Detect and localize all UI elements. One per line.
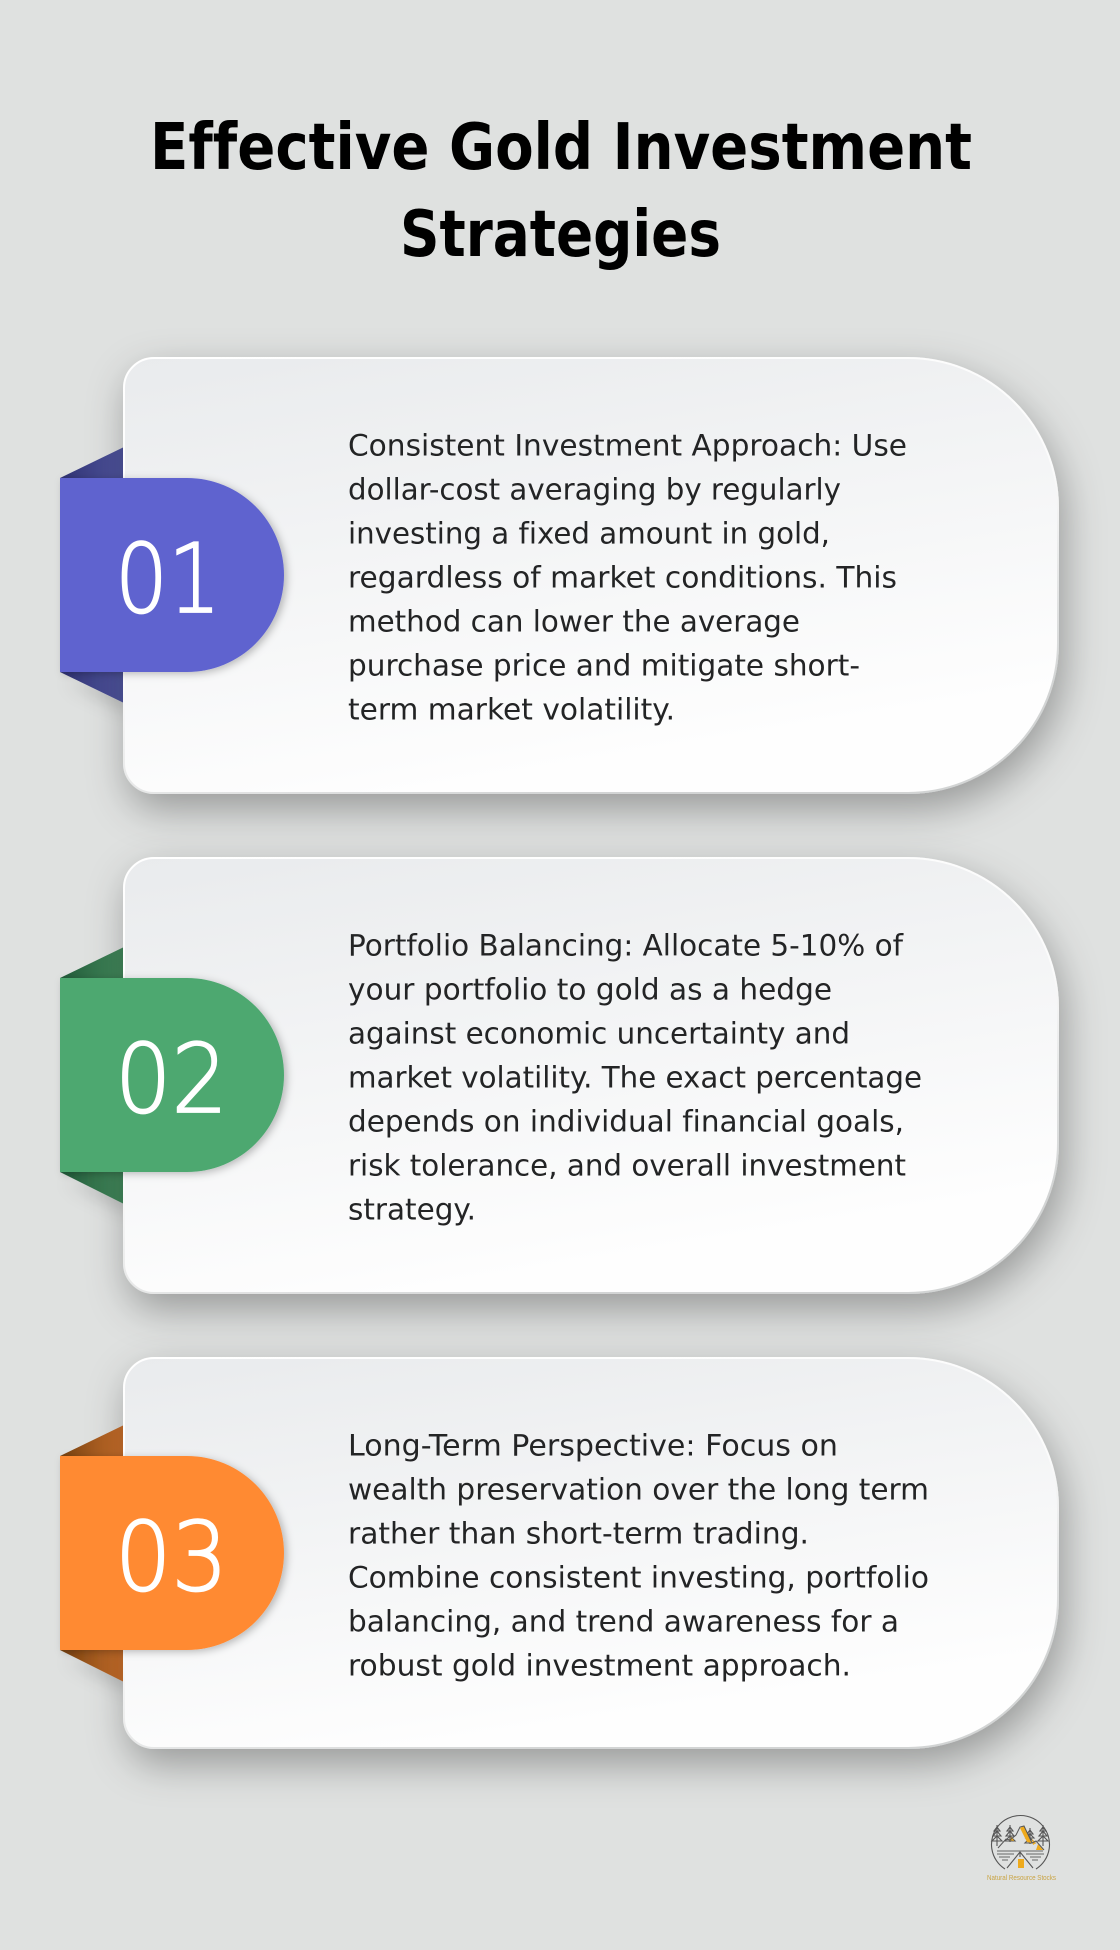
panel: step 02 portfolio balancing — [60, 858, 1058, 1293]
text block 3 — [348, 1428, 929, 1682]
logo wordmark: Natural Resource Stocks — [987, 1875, 1056, 1882]
text block 2: Portfolio Balancing: Allocate 5-10% of — [348, 928, 904, 962]
text block 1: term market volatility. — [348, 692, 675, 726]
text block 1: method can lower the average — [348, 604, 800, 638]
text block 3: rather than short-term trading. — [348, 1516, 809, 1550]
card 3 — [124, 1358, 1058, 1748]
badge 01 — [60, 478, 284, 672]
text block 2 — [348, 928, 922, 1226]
text block 1: Consistent Investment Approach: Use — [348, 428, 907, 462]
badge 02 — [60, 978, 284, 1172]
title: Strategies — [400, 198, 721, 272]
title — [150, 111, 972, 272]
ribbon fold: bottom, blue — [60, 672, 124, 703]
text block 2: depends on individual financial goals, — [348, 1104, 904, 1138]
panel: step 01 consistent investment approach — [60, 358, 1058, 793]
logo ground lines — [997, 1851, 1044, 1860]
panel: step 03 long-term perspective — [60, 1358, 1058, 1748]
text block 3: Long-Term Perspective: Focus on — [348, 1428, 838, 1462]
text block 2: your portfolio to gold as a hedge — [348, 972, 832, 1006]
ribbon fold: top, blue — [60, 447, 124, 478]
text block 1: regardless of market conditions. This — [348, 560, 897, 594]
text block 3: wealth preservation over the long term — [348, 1472, 929, 1506]
logo: Natural Resource Stocks — [987, 1815, 1056, 1882]
card 2 — [124, 858, 1058, 1293]
text block 1 — [348, 428, 907, 726]
text block 2: against economic uncertainty and — [348, 1016, 850, 1050]
card 1 — [124, 358, 1058, 793]
ribbon fold: bottom, orange — [60, 1650, 124, 1682]
badge 03 — [60, 1456, 284, 1650]
ribbon fold: top, green — [60, 947, 124, 978]
logo trees — [992, 1825, 1048, 1846]
text block 1: investing a fixed amount in gold, — [348, 516, 830, 550]
number 03: 03 — [115, 1503, 228, 1613]
text block 2: market volatility. The exact percentage — [348, 1060, 922, 1094]
number 01: 01 — [115, 525, 221, 635]
title: Effective Gold Investment — [150, 111, 972, 185]
number 02: 02 — [115, 1025, 228, 1135]
logo tent — [1007, 1852, 1033, 1868]
text block 3: balancing, and trend awareness for a — [348, 1604, 899, 1638]
ribbon fold: bottom, green — [60, 1172, 124, 1204]
text block 3: robust gold investment approach. — [348, 1648, 851, 1682]
text block 3: Combine consistent investing, portfolio — [348, 1560, 929, 1594]
text block 2: strategy. — [348, 1192, 476, 1226]
text block 1: dollar-cost averaging by regularly — [348, 472, 841, 506]
text block 1: purchase price and mitigate short- — [348, 648, 860, 682]
text block 2: risk tolerance, and overall investment — [348, 1148, 906, 1182]
logo mountains — [998, 1826, 1044, 1850]
logo ring — [992, 1815, 1050, 1869]
ribbon fold: top, orange — [60, 1425, 124, 1456]
